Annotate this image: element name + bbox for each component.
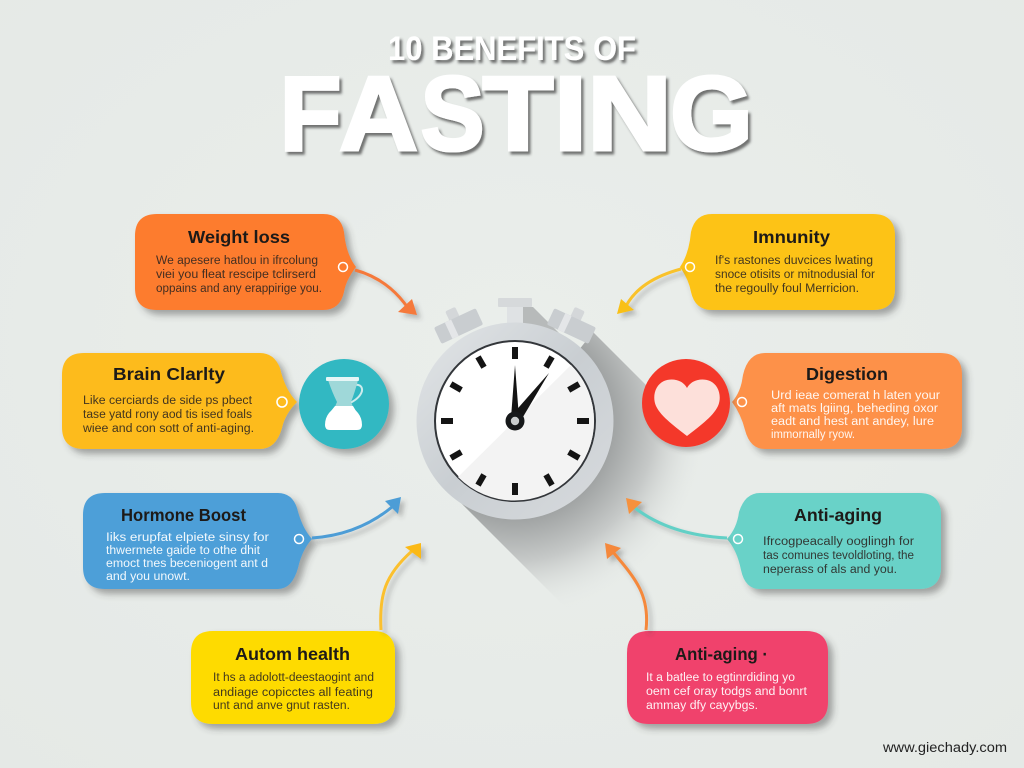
panel: anti-aging teal: neperass of als and you.	[763, 564, 897, 576]
panel: hormone boost: Iiks erupfat elpiete sinsy for	[106, 532, 269, 544]
panel: brain clarity: wiee and con sott of anti-aging.	[82, 423, 254, 435]
panel: weight loss: Weight loss	[188, 227, 290, 247]
panel: anti-aging pink: It a batlee to egtinrdiding yo	[646, 672, 795, 684]
panel: digestion: immornally ryow.	[771, 429, 855, 441]
panel: digestion: Urd ieae comerat h laten your	[771, 390, 940, 402]
title: G	[670, 55, 753, 173]
panel: digestion: aft mats lgiing, beheding oxor	[771, 403, 938, 415]
arrow: hormone boost to clock	[312, 497, 401, 538]
panel: anti-aging pink: oem cef oray todgs and bonrt	[646, 686, 808, 698]
panel: hormone boost: emoct tnes beceniogent ant d	[106, 558, 268, 570]
panel: weight loss: viei you fleat rescipe tclirserd	[156, 269, 316, 281]
panel: autom health: It hs a adolott-deestaogint and	[213, 672, 374, 684]
panel: hormone boost: and you unowt.	[106, 571, 190, 583]
title: N	[587, 55, 672, 173]
panel: weight loss: We apesere hatlou in ifrcolung	[156, 255, 318, 267]
panel: autom health: unt and anve gnut rasten.	[213, 700, 350, 712]
title	[280, 30, 753, 173]
stopwatch with long shadow	[416, 298, 720, 660]
panel: digestion	[732, 353, 962, 449]
title: F	[280, 55, 342, 173]
title: T	[482, 55, 554, 173]
icon: teal circle with carafe	[299, 359, 389, 449]
title: S	[420, 55, 484, 173]
panel: immunity	[680, 214, 895, 310]
panel: weight loss	[135, 214, 356, 310]
panel: digestion: Digestion	[806, 364, 888, 384]
panel: immunity: If's rastones duvcices lwating	[715, 255, 873, 267]
arrow: weight loss to clock	[355, 270, 417, 315]
arrow: anti-aging pink to clock	[605, 543, 647, 630]
panel: hormone boost: thwermete gaide to othe dhit	[106, 545, 261, 557]
panel: digestion: eadt and hest ant andey, lure	[771, 416, 934, 428]
icon: red circle with heart	[642, 359, 730, 447]
panel: anti-aging teal: Ifrcogpeacally ooglingh for	[763, 536, 914, 548]
title: I	[554, 55, 588, 173]
panel: brain clarity: tase yatd rony aod tis ised foals	[83, 409, 252, 421]
panel: autom health: andiage copicctes all feating	[213, 687, 373, 699]
panel: weight loss: oppains and any erappirige you.	[156, 283, 322, 295]
panel: brain clarity	[62, 353, 297, 449]
panel: anti-aging teal: Anti-aging	[794, 505, 882, 525]
panel: brain clarity: Brain Clarlty	[113, 364, 225, 384]
footer url: www.giechady.com	[882, 740, 1007, 755]
panel: anti-aging teal: tas comunes tevoldloting, the	[763, 550, 914, 562]
panel: immunity: Imnunity	[753, 227, 830, 247]
panel: hormone boost	[83, 493, 312, 589]
panel: brain clarity: Like cerciards de side ps pbect	[83, 395, 253, 407]
panel: hormone boost: Hormone Boost	[121, 505, 246, 525]
arrow: autom health to clock	[381, 543, 421, 630]
panel: anti-aging teal	[727, 493, 941, 589]
arrow: anti-aging to clock	[626, 498, 727, 538]
panel: anti-aging pink: ammay dfy cayybgs.	[646, 700, 758, 712]
panel: autom health	[191, 631, 395, 724]
panel: anti-aging pink: Anti-aging ·	[675, 644, 768, 664]
panel: immunity: snoce otisits or mitnodusial for	[715, 269, 875, 281]
panel: immunity: the regoully foul Merricion.	[715, 283, 859, 295]
panel: anti-aging pink	[627, 631, 828, 724]
title: 10 BENEFITS OF	[388, 30, 636, 68]
arrow: immunity to clock	[617, 269, 681, 314]
title: A	[339, 55, 418, 173]
panel: autom health: Autom health	[235, 644, 350, 664]
